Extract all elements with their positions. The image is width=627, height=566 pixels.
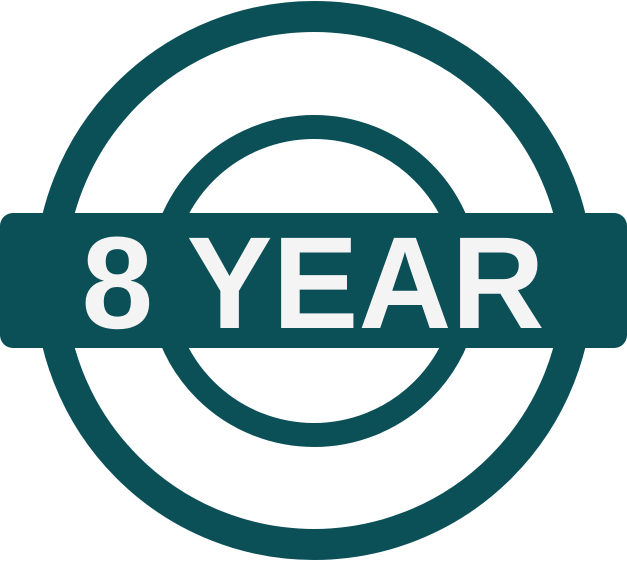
outer ring (50, 16, 578, 544)
banner (0, 213, 627, 348)
inner ring (160, 127, 468, 435)
banner text: 8 YEAR (82, 209, 544, 356)
